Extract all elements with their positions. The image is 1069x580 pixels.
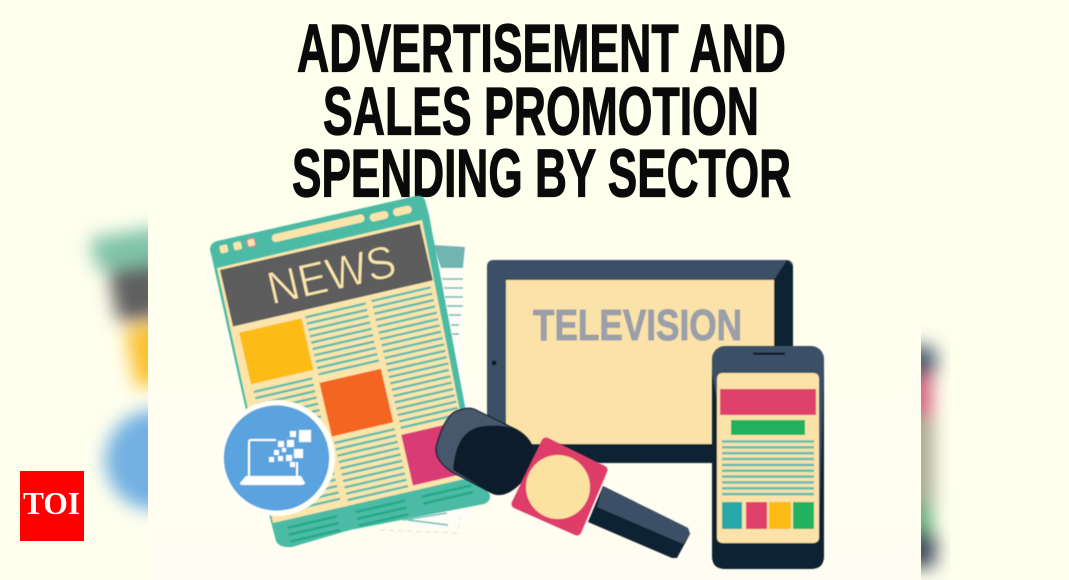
logo: TOI: TOI	[23, 485, 80, 521]
icon: smartphone	[712, 346, 824, 569]
television label: TELEVISION	[533, 301, 742, 350]
blurred right backdrop	[900, 346, 936, 568]
icon: newspaper	[210, 196, 490, 547]
microphone handle	[588, 486, 690, 558]
icon: digital laptop badge	[219, 400, 335, 516]
text lines	[240, 287, 473, 515]
yellow block	[239, 318, 313, 384]
top bar pills	[219, 202, 413, 257]
news banner	[220, 224, 433, 326]
newspaper page	[217, 220, 473, 523]
title: ADVERTISEMENT AND	[297, 10, 786, 86]
blurred left backdrop	[80, 216, 148, 522]
icon: back paper behind newspaper	[380, 245, 470, 533]
title	[292, 10, 791, 212]
icon: television	[487, 260, 793, 463]
pink block	[401, 421, 471, 485]
news banner: NEWS	[262, 234, 401, 314]
microphone head	[436, 408, 533, 495]
logo: TOI	[20, 471, 84, 541]
microphone collar	[516, 442, 603, 531]
title: SPENDING BY SECTOR	[292, 136, 791, 212]
orange block	[319, 369, 393, 436]
footer lines	[287, 485, 475, 541]
center panel background	[148, 0, 921, 580]
title: SALES PROMOTION	[323, 74, 759, 150]
icon: microphone	[436, 408, 690, 558]
